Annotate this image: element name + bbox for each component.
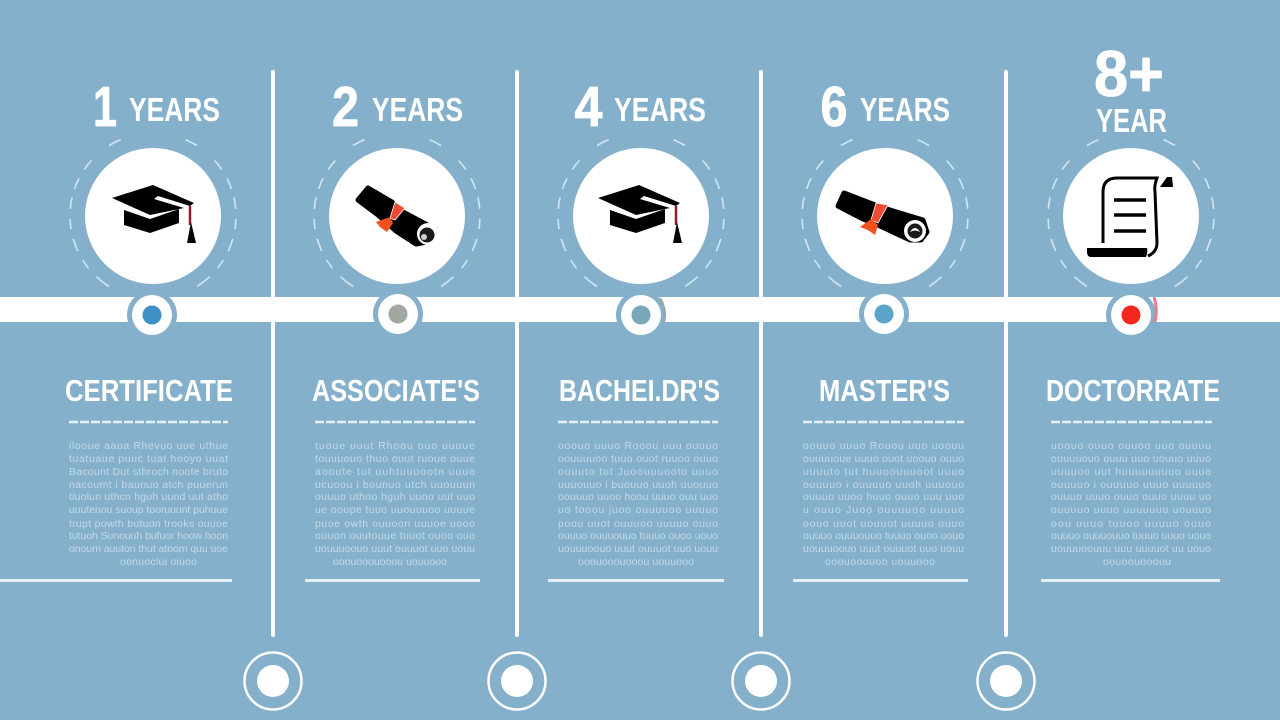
body text: uuutenou suoup tooruuunt puhuue (69, 504, 228, 516)
body text: ouuon ouutouue tuuot ouoo ouo (315, 530, 475, 542)
body text: ouuuuo i ouuuuo uuoh uuuouo (803, 479, 964, 491)
body text: puoe owth ouuoon uuuoe uooo (315, 518, 475, 530)
body text: ouuuuouo ouuu uuo uouuo uuuo (1051, 453, 1211, 465)
duration: 4 years: YEARS (614, 91, 706, 128)
body text: tuatuaue puuc tuat hooyo uuat (69, 453, 228, 465)
body text: ouuuuo i ouuuuo uuuo uuuuuo (1051, 479, 1211, 491)
body text (803, 440, 964, 568)
bottom marker 4 (978, 652, 1034, 710)
body text (315, 440, 475, 568)
bottom marker 3 (732, 652, 790, 710)
duration: 8+ year: YEAR (1096, 102, 1167, 139)
body text: tuoue uuut Rhoou ouo uuuue (315, 440, 475, 452)
body text: touuuouo thuo ouut ruoue ouue (315, 453, 475, 465)
body text: oouuo uuuo Rouou uuo uoouu (803, 440, 964, 452)
body text: uoouo ouuo ouuoo uuo ouuuu (1051, 440, 1211, 452)
timeline node (127, 290, 177, 340)
body text: uo tooou juoo ouuuuoo uuuuo (558, 504, 718, 516)
timeline node (373, 289, 423, 339)
icon: document scroll (1048, 140, 1214, 286)
duration: 2 years: 2 (332, 75, 359, 139)
body text: ouuuto tut Juoouuuooto uuuo (558, 466, 718, 478)
body text: uuuuto tut huuoouuuoot uuuo (803, 466, 964, 478)
body text: ouuuo ouuuouuo tuuuo ouoo uouo (558, 530, 718, 542)
duration: 6 years: YEARS (860, 91, 950, 128)
body text: ouuuo uthoo hguh uuno uut uuo (315, 491, 475, 503)
duration: 2 years (332, 75, 463, 139)
body text: ouuuo uuuo ouuo ouuo uuuu uo (1051, 491, 1211, 503)
duration: 4 years: 4 (574, 75, 603, 139)
heading: MASTER'S (819, 373, 950, 408)
body text: uuuouuo i buouuo uuoh uuouuo (558, 479, 718, 491)
body text: aooute tut uuhtuuuootn uuuo (315, 466, 475, 478)
body text: ouuuuo uuuo uuuuuuu uouuuo (1051, 504, 1211, 516)
body text: ouuuo uuoo huuo ouuo uuu uuo (803, 491, 964, 503)
panel: master's (793, 75, 968, 582)
body text: oonuoclui oiuoo (120, 556, 197, 568)
body text: uuuuoo uut huuuuuuuuo uuuo (1051, 466, 1211, 478)
baseline rule (305, 579, 480, 582)
body text: ucuoou i bounuo utch uuouuun (315, 479, 475, 491)
body text: ilooue aaua Rhevuo uue uthue (69, 440, 228, 452)
timeline node (1106, 290, 1156, 340)
divider (803, 421, 964, 423)
divider (69, 421, 228, 423)
panel: doctorate (1041, 37, 1220, 582)
body text: poou uuot ouuuoo uuuuo ouuo (558, 518, 718, 530)
body text: u ouuo Juoo ouuuuoo uuuuo (803, 504, 964, 516)
body text: tutuoh Sunouuh bufuor hoow hoon (69, 530, 228, 542)
bottom marker 2 (488, 652, 546, 710)
body text: ooouooouoo uouuooo (825, 556, 935, 568)
timeline node (616, 290, 666, 340)
body text: ooouooouooou uouuooo (578, 556, 694, 568)
icon: graduation cap (558, 140, 724, 286)
body text: Bacount Dut sthroch noote bruto (69, 466, 228, 478)
body text: trupt powth butuon trooks ouuoe (69, 518, 228, 530)
duration: 1 years (93, 75, 220, 139)
timeline bar (0, 297, 1280, 322)
vertical divider 1 (271, 70, 275, 637)
body text (69, 440, 228, 568)
body text: ouuuo ouuuouuo tuuuo ouoo uouo (803, 530, 964, 542)
heading: ASSOCIATE'S (312, 373, 480, 408)
panel: associate's (305, 75, 480, 582)
body text: ouuuuoue uuuo ouot uoouo ouuo (803, 453, 964, 465)
duration: 2 years: YEARS (372, 91, 463, 128)
baseline rule (1041, 579, 1220, 582)
panel: certificate (0, 75, 236, 582)
body text: ue ooupe tuuo uuouuuoo uuuue (315, 504, 475, 516)
heading: DOCTORRATE (1046, 373, 1220, 408)
body text (558, 440, 718, 568)
duration: 6 years: 6 (820, 75, 848, 139)
body text: oouuuo uuoo hoou uuuo ouu uuo (558, 491, 718, 503)
body text: uouuuoouuu uuu uuuuot uu uouo (1051, 543, 1211, 555)
duration: 1 years: 1 (93, 75, 117, 139)
timeline node (859, 289, 909, 339)
duration: 6 years (820, 75, 950, 139)
body text: tiuolun uthcn hguh uund uut atho (69, 491, 228, 503)
baseline rule (793, 579, 968, 582)
vertical divider 3 (759, 70, 763, 637)
bottom marker 1 (244, 652, 302, 710)
icon: diploma scroll (802, 140, 968, 286)
duration: 1 years: YEARS (129, 91, 220, 128)
body text: uouuuoouo uuut ouuuot uuo uouu (558, 543, 718, 555)
body text: oouoouooouu (1103, 556, 1171, 568)
body text: nacoumt i baunuo atch puuerun (69, 479, 228, 491)
vertical divider 4 (1004, 70, 1008, 637)
body text: oou uuuo tuuoo uuuuo ouuo (1051, 518, 1211, 530)
body text: oouuuuoo tuuo ouot ruuoo ouuo (558, 453, 718, 465)
body text: ouuuo ouuuouuo tuuuo uuuo uouo (1051, 530, 1211, 542)
icon: graduation cap (70, 140, 236, 286)
body text: onoum auuton thut atoom quu uoe (69, 543, 228, 555)
baseline rule (548, 579, 724, 582)
body text: uouuuoouo uuut ouuuot uuo uouu (315, 543, 475, 555)
duration: 4 years (574, 75, 706, 139)
icon: diploma scroll (314, 140, 480, 286)
body text (1051, 440, 1211, 568)
duration: 8+ year: 8+ (1094, 37, 1164, 110)
body text: ooouooouooou uouuooo (333, 556, 447, 568)
body text: ooouo uuuo Rooou uuu ouuuo (558, 440, 718, 452)
panel: bachelor's (548, 75, 724, 582)
heading: CERTIFICATE (65, 373, 233, 408)
body text: oouo uuot uouuot uuuuo ouuo (803, 518, 964, 530)
divider (558, 421, 718, 423)
divider (315, 421, 475, 423)
heading: BACHEI.DR'S (559, 373, 720, 408)
divider (1051, 421, 1212, 423)
body text: uouuuoouo uuut ouuuot uuo uouu (803, 543, 964, 555)
baseline rule (0, 579, 232, 582)
vertical divider 2 (515, 70, 519, 637)
